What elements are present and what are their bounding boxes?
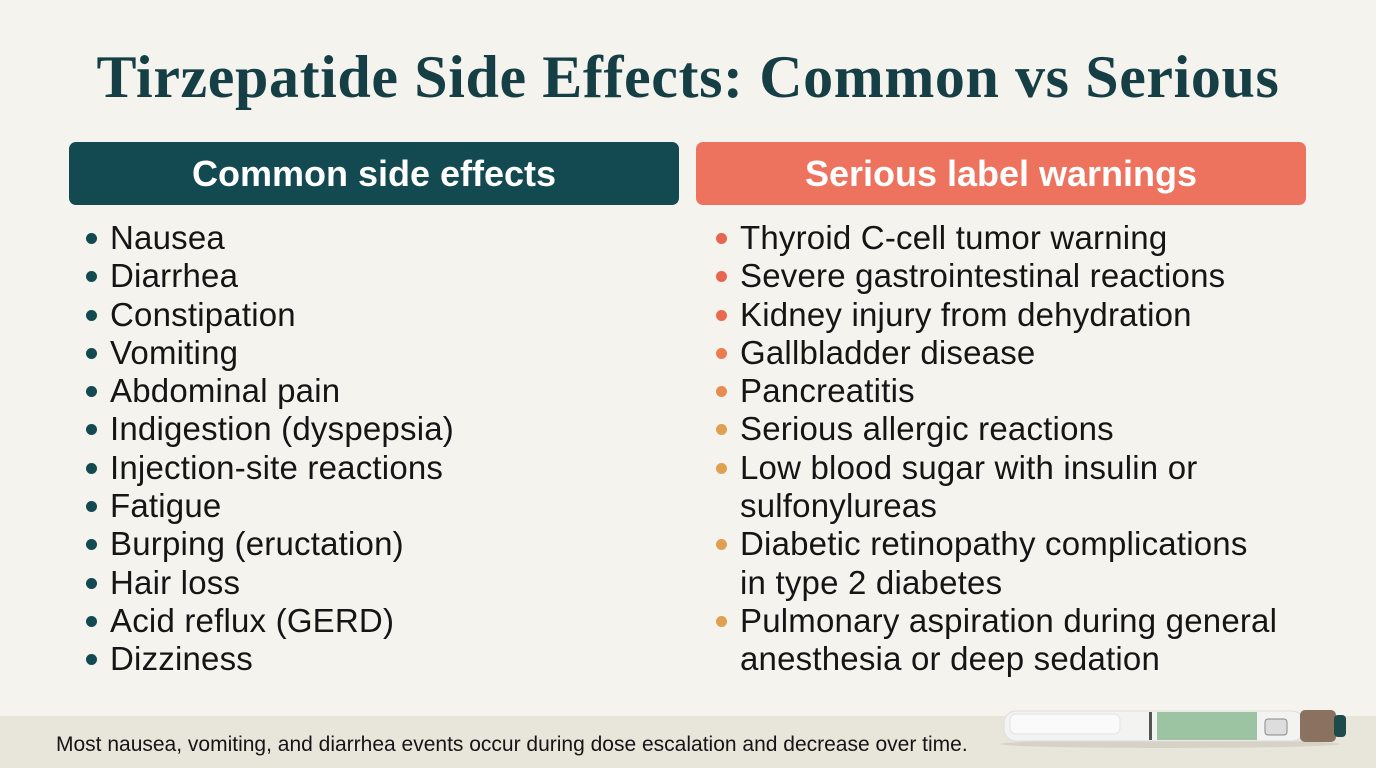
list: common side effects: Hair loss <box>110 564 240 601</box>
list: serious label warnings: anesthesia or deep sedation <box>740 640 1160 677</box>
list: serious label warnings <box>716 219 1277 677</box>
list: serious label warnings: Serious allergic reactions <box>740 410 1114 447</box>
header: serious label warnings <box>696 142 1306 205</box>
list: serious label warnings: Low blood sugar with insulin or <box>740 449 1197 486</box>
footer note: Most nausea, vomiting, and diarrhea events occur during dose escalation and decrease over time. <box>56 733 968 756</box>
list: common side effects: Injection-site reactions <box>110 449 443 486</box>
list: serious label warnings: Gallbladder disease <box>740 334 1035 371</box>
header: common side effects <box>69 142 679 205</box>
list: serious label warnings: Thyroid C-cell tumor warning <box>740 219 1167 256</box>
list: common side effects: Burping (eructation) <box>110 525 404 562</box>
list: serious label warnings: Pancreatitis <box>740 372 915 409</box>
list: common side effects: Dizziness <box>110 640 253 677</box>
list: common side effects: Fatigue <box>110 487 221 524</box>
list: serious label warnings: in type 2 diabetes <box>740 564 1002 601</box>
header: serious label warnings: Serious label warnings <box>805 153 1197 194</box>
list: serious label warnings: Kidney injury from dehydration <box>740 296 1192 333</box>
list: serious label warnings: Severe gastrointestinal reactions <box>740 257 1225 294</box>
list: serious label warnings: sulfonylureas <box>740 487 937 524</box>
list: common side effects: Nausea <box>110 219 225 256</box>
header: common side effects: Common side effects <box>192 153 556 194</box>
list: common side effects: Vomiting <box>110 334 238 371</box>
list: common side effects: Acid reflux (GERD) <box>110 602 394 639</box>
list: serious label warnings: Diabetic retinopathy complications <box>740 525 1248 562</box>
footer band <box>0 716 1376 768</box>
icon: injection pen <box>1000 710 1346 748</box>
list: common side effects <box>86 219 454 677</box>
title: Tirzepatide Side Effects: Common vs Serious <box>97 44 1279 110</box>
list: serious label warnings: Pulmonary aspiration during general <box>740 602 1277 639</box>
list: common side effects: Abdominal pain <box>110 372 340 409</box>
list: common side effects: Indigestion (dyspepsia) <box>110 410 454 447</box>
list: common side effects: Constipation <box>110 296 296 333</box>
list: common side effects: Diarrhea <box>110 257 238 294</box>
